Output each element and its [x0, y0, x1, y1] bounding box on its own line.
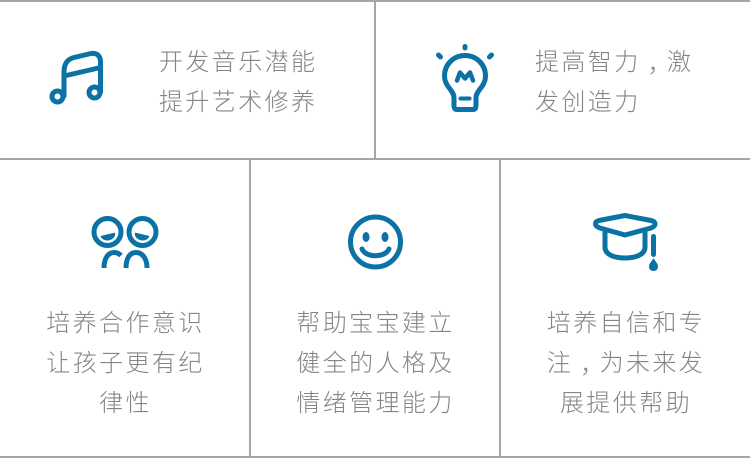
- panel: raise intelligence: [436, 44, 693, 116]
- text: confidence: 展提供帮助: [560, 390, 692, 417]
- text: emotion: 健全的人格及: [296, 350, 455, 377]
- icon: graduation cap: [593, 213, 658, 271]
- icon: two faces: [92, 216, 158, 268]
- icon: smiley: [348, 214, 403, 270]
- panel: emotion: [296, 214, 455, 417]
- text: emotion: 情绪管理能力: [296, 390, 455, 417]
- text: cooperation: 让孩子更有纪: [46, 350, 205, 377]
- text: cooperation: 律性: [99, 390, 152, 417]
- text: confidence: [547, 310, 705, 417]
- text: cooperation: 培养合作意识: [46, 310, 205, 337]
- text: confidence: 培养自信和专: [547, 310, 705, 337]
- text: develop music potential: 提升艺术修养: [159, 89, 317, 116]
- panel: cooperation: [46, 216, 205, 417]
- text: cooperation: [46, 310, 205, 417]
- text: develop music potential: [159, 49, 317, 116]
- text: raise intelligence: 发创造力: [535, 89, 641, 116]
- panel: music potential: [50, 49, 317, 116]
- text: raise intelligence: 提高智力 ，激: [535, 49, 693, 78]
- text: develop music potential: 开发音乐潜能: [159, 49, 317, 76]
- icon: light bulb: [436, 44, 494, 112]
- panel: confidence: [547, 213, 705, 417]
- text: raise intelligence: [535, 49, 693, 116]
- text: confidence: 注 ，为未来发: [547, 350, 705, 379]
- text: emotion: 帮助宝宝建立: [296, 310, 455, 337]
- icon: music note: [50, 50, 103, 104]
- text: emotion: [296, 310, 455, 417]
